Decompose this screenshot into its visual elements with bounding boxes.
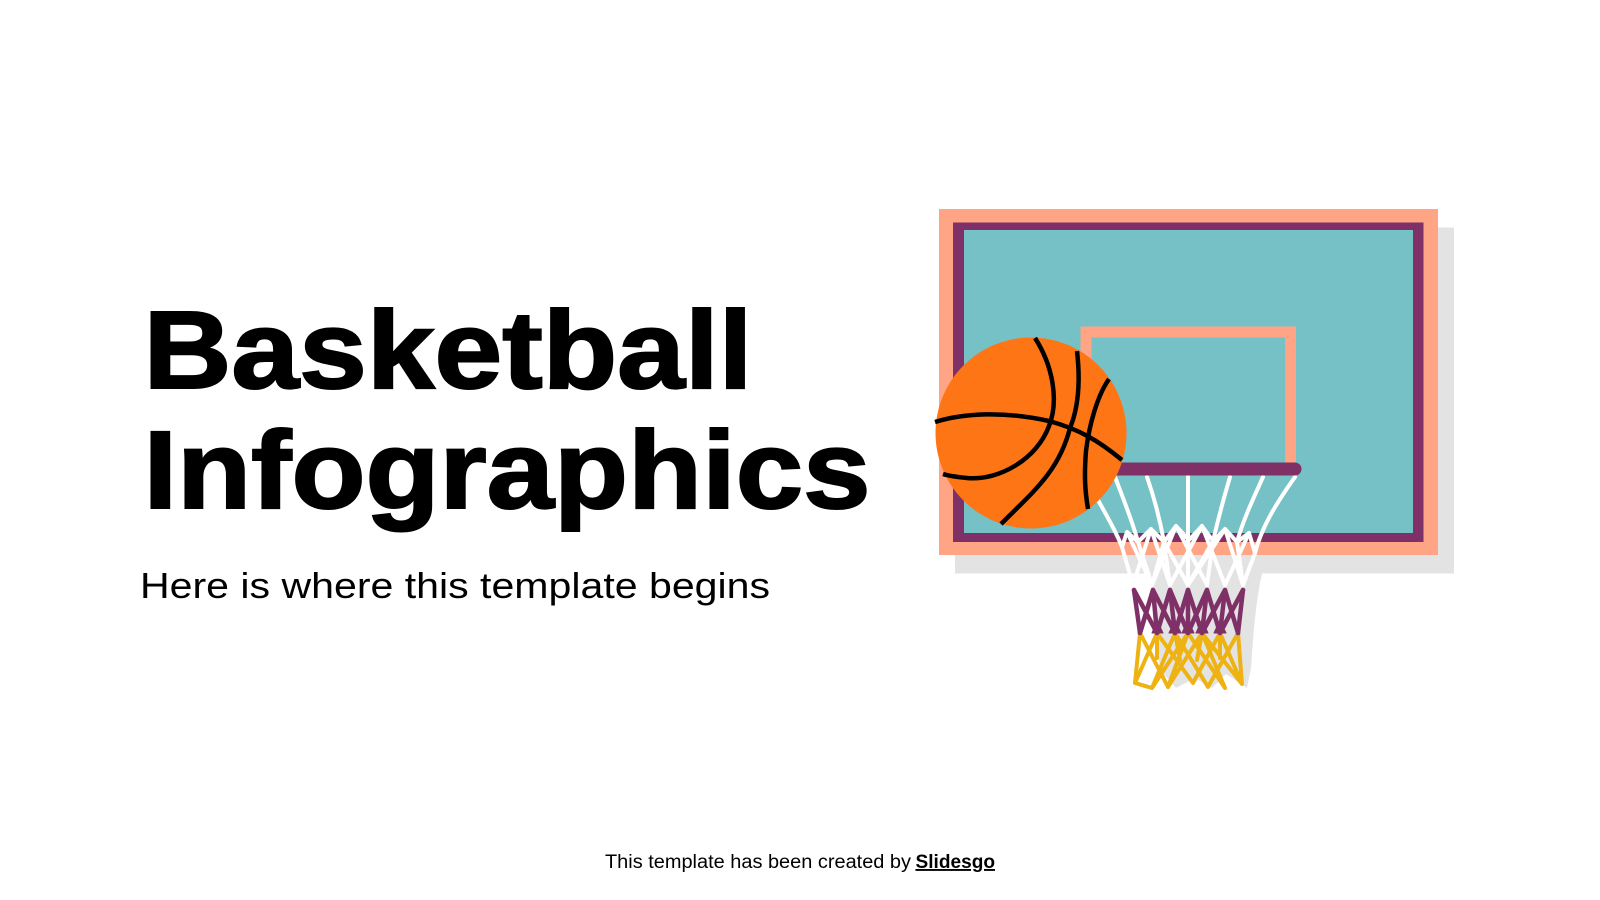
title: Infographics [144,409,870,532]
target square [1080,332,1296,468]
purple bowties [1152,620,1226,633]
net: yellow lower section [1135,633,1242,688]
backboard shadow [955,228,1454,688]
title: Basketball [144,289,752,412]
backboard [939,209,1438,555]
illustration: basketball hoop [935,209,1454,688]
credit line: Slidesgo [916,852,995,873]
net: white top section [1098,477,1295,585]
net [1098,477,1295,688]
basketball seams [935,338,1122,524]
rim [1086,462,1295,476]
basketball [935,338,1126,528]
subtitle: Here is where this template begins [140,565,770,606]
title [144,289,870,532]
net: purple middle section [1134,590,1243,633]
credit line: This template has been created by [605,852,912,873]
